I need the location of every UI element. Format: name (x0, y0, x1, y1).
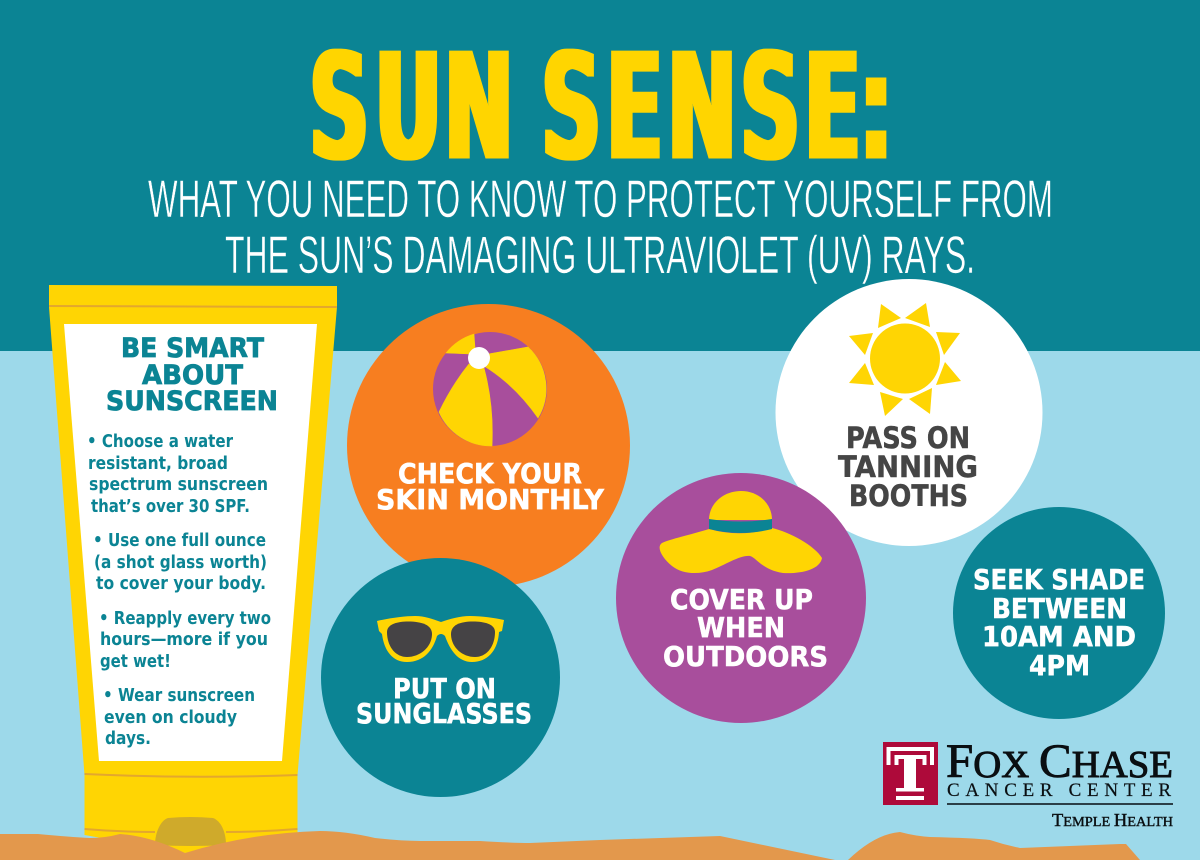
white circle (776, 279, 1042, 546)
panel: sunscreen tube (49, 285, 337, 853)
tube cap (155, 817, 226, 846)
label: put on sunglasses: PUT ON (393, 673, 496, 705)
label: cover up when outdoors: OUTDOORS (663, 641, 828, 673)
icon: sunglasses (377, 616, 504, 662)
label: pass on tanning booths: PASS ON (846, 421, 970, 455)
panel: pass on tanning booths (776, 279, 1042, 546)
tube tips list: (a shot glass worth) (94, 553, 267, 573)
label: seek shade between 10am and 4pm: 4PM (1029, 649, 1090, 682)
tube crimp line (49, 306, 337, 307)
label: cover up when outdoors (663, 584, 828, 673)
label: put on sunglasses: SUNGLASSES (356, 698, 532, 730)
label: pass on tanning booths: TANNING (838, 450, 978, 484)
logo: Fox Chase Cancer Center (883, 735, 1173, 830)
label: check your skin monthly (376, 458, 605, 516)
label: seek shade between 10am and 4pm (973, 563, 1145, 682)
label: seek shade between 10am and 4pm: 10AM AND (982, 620, 1136, 653)
tube tips list: days. (105, 729, 151, 749)
purple circle (616, 473, 866, 723)
tube heading: BE SMART (121, 333, 265, 364)
title: SUN SENSE: (310, 22, 893, 194)
label: pass on tanning booths (838, 421, 978, 513)
logo endorsement: TEMPLE HEALTH (1052, 810, 1173, 830)
label: check your skin monthly: CHECK YOUR (398, 458, 582, 490)
tube tips list: resistant, broad (88, 454, 228, 474)
panel: seek shade (953, 507, 1165, 719)
tube tips list: get wet! (100, 652, 171, 672)
teal circle (321, 558, 560, 797)
icon: beach ball (433, 332, 547, 446)
tube tips list: spectrum sunscreen (89, 475, 268, 495)
tube tips list: that’s over 30 SPF. (91, 497, 250, 517)
orange circle (347, 304, 630, 587)
logo mark: Temple T (883, 742, 938, 805)
tube lower lines (84, 774, 298, 832)
label: seek shade between 10am and 4pm: BETWEEN (992, 592, 1127, 625)
label: check your skin monthly: SKIN MONTHLY (376, 484, 605, 516)
tube tips list (87, 432, 271, 749)
tube tips list: even on cloudy (104, 708, 238, 728)
tube tips list: • Choose a water (87, 432, 233, 452)
label: seek shade between 10am and 4pm: SEEK SHADE (973, 563, 1145, 596)
tube label (64, 324, 317, 761)
tube heading: SUNSCREEN (106, 386, 278, 417)
label: pass on tanning booths: BOOTHS (849, 479, 968, 513)
sand dunes (0, 831, 1140, 860)
tube tips list: • Use one full ounce (93, 531, 266, 551)
panel: put on sunglasses (321, 558, 560, 797)
logo wordmark: FOX CHASE (946, 735, 1173, 788)
icon: sun (849, 303, 961, 416)
panel: cover up (616, 473, 866, 723)
logo subline: CANCER CENTER (947, 780, 1171, 801)
tube tips list: • Wear sunscreen (103, 686, 255, 706)
label: put on sunglasses (356, 673, 532, 730)
logo rule (947, 803, 1173, 805)
teal circle (953, 507, 1165, 719)
icon: sun hat (660, 491, 822, 573)
tube tips list: hours—more if you (100, 630, 268, 650)
tube tips list: to cover your body. (96, 574, 266, 594)
tube heading (106, 333, 278, 417)
panel: check your skin (347, 304, 630, 587)
label: cover up when outdoors: COVER UP (670, 584, 813, 616)
tube tips list: • Reapply every two (99, 609, 271, 629)
tube body (49, 285, 337, 853)
header band (0, 0, 1200, 351)
tube heading: ABOUT (142, 360, 244, 391)
label: cover up when outdoors: WHEN (697, 612, 785, 644)
subtitle (148, 170, 1053, 285)
